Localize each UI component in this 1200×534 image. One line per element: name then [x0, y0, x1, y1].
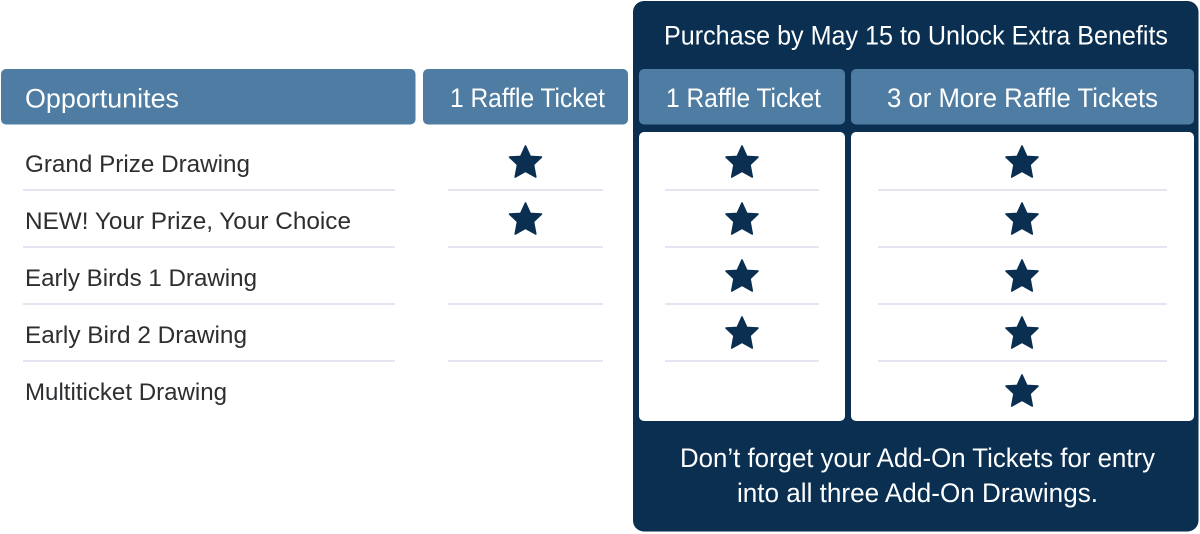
- header: 3 or more raffle tickets: 3 or More Raffle Tickets: [887, 83, 1158, 113]
- text: add-on tickets reminder: [680, 443, 1155, 508]
- heading: purchase by May 15: Purchase by May 15 to Unlock Extra Benefits: [664, 20, 1168, 50]
- list: opportunity names: Grand Prize Drawing: [25, 151, 250, 178]
- list: opportunity names: Early Birds 1 Drawing: [25, 265, 257, 292]
- panel: opportunities header: [1, 69, 416, 124]
- column: 3 or more raffle tickets stars: [851, 132, 1194, 421]
- panel: 1 raffle ticket header: 1 Raffle Ticket: [450, 83, 605, 113]
- list: opportunity names: [23, 151, 395, 406]
- list: opportunity names: Multiticket Drawing: [25, 379, 227, 406]
- column: early 1 raffle ticket stars: [639, 132, 845, 421]
- panel: purchase by May 15 benefits: [633, 1, 1198, 532]
- column: 1 raffle ticket stars: [448, 146, 603, 361]
- text: add-on tickets reminder: into all three Add-On Drawings.: [737, 478, 1098, 508]
- panel: opportunities header: Opportunites: [25, 84, 179, 114]
- header: early 1 raffle ticket: [639, 69, 845, 124]
- header: early 1 raffle ticket: 1 Raffle Ticket: [666, 83, 821, 113]
- list: opportunity names: Early Bird 2 Drawing: [25, 322, 247, 349]
- header: 3 or more raffle tickets: [851, 69, 1194, 124]
- text: add-on tickets reminder: Don’t forget your Add-On Tickets for entry: [680, 443, 1155, 473]
- panel: 1 raffle ticket header: [423, 69, 628, 124]
- list: opportunity names: NEW! Your Prize, Your Choice: [25, 208, 351, 235]
